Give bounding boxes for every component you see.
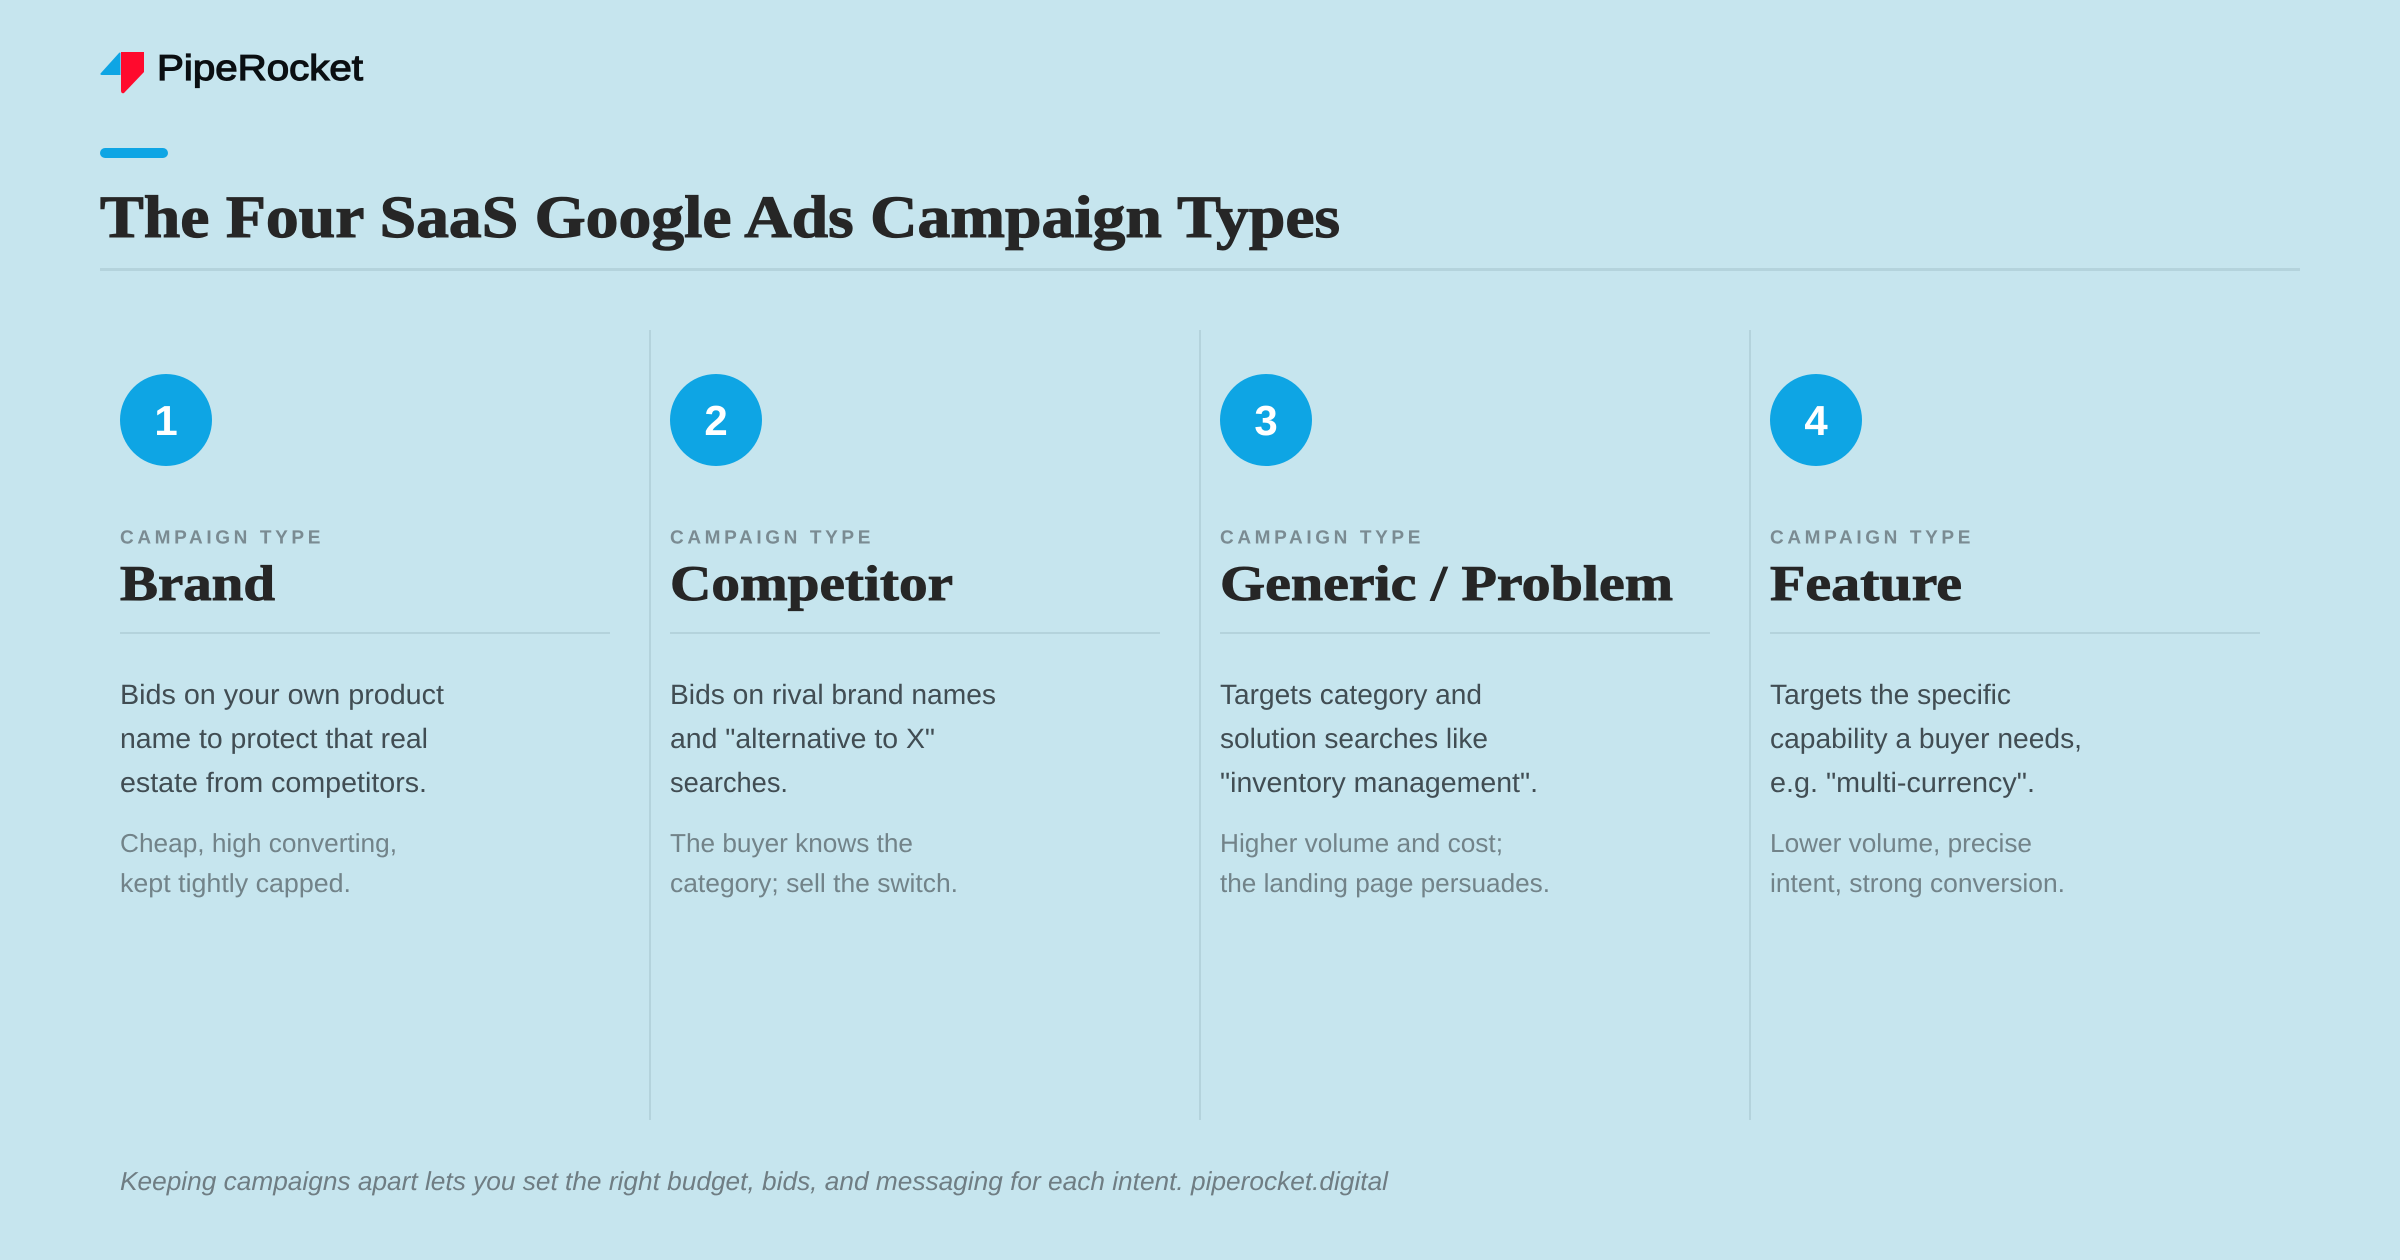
description: Targets the specific (1770, 679, 2011, 710)
description: e.g. "multi-currency". (1770, 767, 2035, 798)
heading: Competitor (670, 555, 953, 611)
description (120, 679, 444, 798)
heading rule (1770, 632, 2260, 634)
heading rule (120, 632, 610, 634)
note (670, 828, 958, 898)
note (1220, 828, 1550, 898)
number badge 4 (1770, 374, 1862, 466)
number badge 1 (120, 374, 212, 466)
note: kept tightly capped. (120, 868, 351, 898)
panel: Brand (120, 374, 610, 898)
heading: Generic / Problem (1220, 555, 1673, 611)
number badge 2: 2 (704, 397, 728, 444)
note: Higher volume and cost; (1220, 828, 1503, 858)
title rule (100, 268, 2300, 271)
panel: Generic / Problem (1220, 374, 1710, 898)
description: Bids on your own product (120, 679, 444, 710)
number badge 3: 3 (1254, 397, 1278, 444)
description: solution searches like (1220, 723, 1488, 754)
eyebrow: CAMPAIGN TYPE (120, 528, 323, 548)
column dividers (649, 330, 1751, 1120)
description: Targets category and (1220, 679, 1482, 710)
number badge 3 (1220, 374, 1312, 466)
note: category; sell the switch. (670, 868, 958, 898)
description: "inventory management". (1220, 767, 1538, 798)
description: Bids on rival brand names (670, 679, 996, 710)
description: name to protect that real (120, 723, 428, 754)
note: the landing page persuades. (1220, 868, 1550, 898)
logo: PipeRocket (100, 47, 363, 93)
heading rule (1220, 632, 1710, 634)
description (1220, 679, 1538, 798)
description: searches. (670, 767, 788, 798)
panel: Competitor (670, 374, 1160, 898)
number badge 4: 4 (1804, 397, 1828, 444)
description: capability a buyer needs, (1770, 723, 2082, 754)
note (120, 828, 397, 898)
eyebrow: CAMPAIGN TYPE (670, 528, 873, 548)
number badge 2 (670, 374, 762, 466)
note: The buyer knows the (670, 828, 913, 858)
note: Cheap, high converting, (120, 828, 397, 858)
heading: Feature (1770, 555, 1962, 611)
heading: Brand (120, 555, 275, 611)
accent bar (100, 148, 168, 158)
title: The Four SaaS Google Ads Campaign Types (100, 184, 1340, 251)
description: estate from competitors. (120, 767, 427, 798)
description (1770, 679, 2082, 798)
eyebrow: CAMPAIGN TYPE (1770, 528, 1973, 548)
description (670, 679, 996, 798)
icon: rocket mark (100, 52, 144, 93)
eyebrow: CAMPAIGN TYPE (1220, 528, 1423, 548)
note: Lower volume, precise (1770, 828, 2032, 858)
panel: Feature (1770, 374, 2260, 898)
logo wordmark: PipeRocket (157, 47, 363, 88)
number badge 1: 1 (154, 397, 178, 444)
note (1770, 828, 2065, 898)
footer note: Keeping campaigns apart lets you set the right budget, bids, and messaging for each intent. piperocket.digital (120, 1166, 1389, 1196)
description: and "alternative to X" (670, 723, 935, 754)
heading rule (670, 632, 1160, 634)
note: intent, strong conversion. (1770, 868, 2065, 898)
